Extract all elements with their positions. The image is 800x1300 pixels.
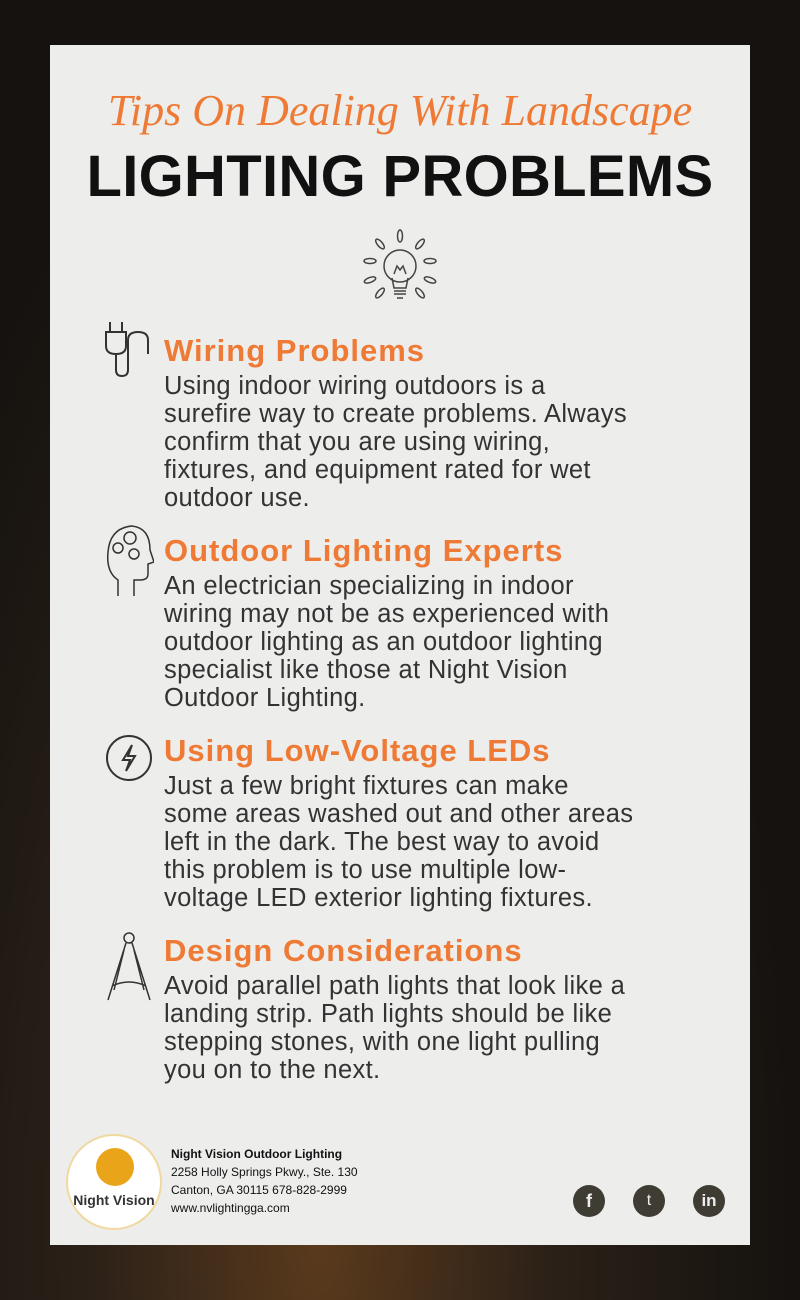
text: wiring: fixtures, and equipment rated for wet — [164, 456, 591, 484]
text: LEDs: left in the dark. The best way to avoid — [164, 828, 600, 856]
heading: experts: Outdoor Lighting Experts — [164, 533, 563, 568]
heading: LEDs: Using Low-Voltage LEDs — [164, 733, 551, 768]
contact info — [171, 1147, 358, 1215]
contact info: www.nvlightingga.com — [171, 1201, 290, 1215]
text: LEDs: some areas washed out and other areas — [164, 800, 633, 828]
text: wiring — [164, 372, 627, 512]
text: design: landing strip. Path lights should be like — [164, 1000, 612, 1028]
social icons — [573, 1185, 725, 1217]
icon: compass — [107, 932, 151, 1000]
title: script subtitle: Tips On Dealing With Landscape — [108, 86, 692, 135]
text: wiring: outdoor use. — [164, 484, 310, 512]
icon: bolt circle — [106, 735, 152, 781]
text: experts: An electrician specializing in indoor — [164, 572, 574, 600]
contact info: Canton, GA 30115 678-828-2999 — [171, 1183, 347, 1197]
text: experts: wiring may not be as experienced with — [164, 600, 609, 628]
text: LEDs: this problem is to use multiple low- — [164, 856, 566, 884]
icon: head with gears — [106, 525, 154, 596]
text: LEDs: voltage LED exterior lighting fixtures. — [164, 884, 593, 912]
logo: Night Vision — [73, 1192, 155, 1208]
contact info: Night Vision Outdoor Lighting — [171, 1147, 342, 1161]
icon: plug — [105, 322, 149, 377]
text: wiring: surefire way to create problems. Always — [164, 400, 627, 428]
text: design: you on to the next. — [164, 1056, 380, 1084]
text: design: Avoid parallel path lights that look like a — [164, 972, 625, 1000]
social icons: f — [586, 1191, 592, 1211]
text: design: stepping stones, with one light pulling — [164, 1028, 600, 1056]
text: wiring: Using indoor wiring outdoors is a — [164, 372, 546, 400]
text: LEDs: Just a few bright fixtures can make — [164, 772, 569, 800]
heading: design: Design Considerations — [164, 933, 523, 968]
title: main: LIGHTING PROBLEMS — [86, 144, 714, 209]
heading: wiring: Wiring Problems — [164, 333, 425, 368]
text: experts: specialist like those at Night Vision — [164, 656, 568, 684]
contact info: 2258 Holly Springs Pkwy., Ste. 130 — [171, 1165, 358, 1179]
logo — [66, 1134, 162, 1230]
text: wiring: confirm that you are using wiring, — [164, 428, 550, 456]
text: experts: outdoor lighting as an outdoor lighting — [164, 628, 603, 656]
social icons: t — [647, 1192, 651, 1209]
text: experts: Outdoor Lighting. — [164, 684, 366, 712]
text: LEDs — [164, 772, 633, 912]
text: design — [164, 972, 625, 1084]
text: experts — [164, 572, 609, 712]
icon: light bulb — [363, 229, 437, 299]
social icons: in — [701, 1191, 717, 1210]
